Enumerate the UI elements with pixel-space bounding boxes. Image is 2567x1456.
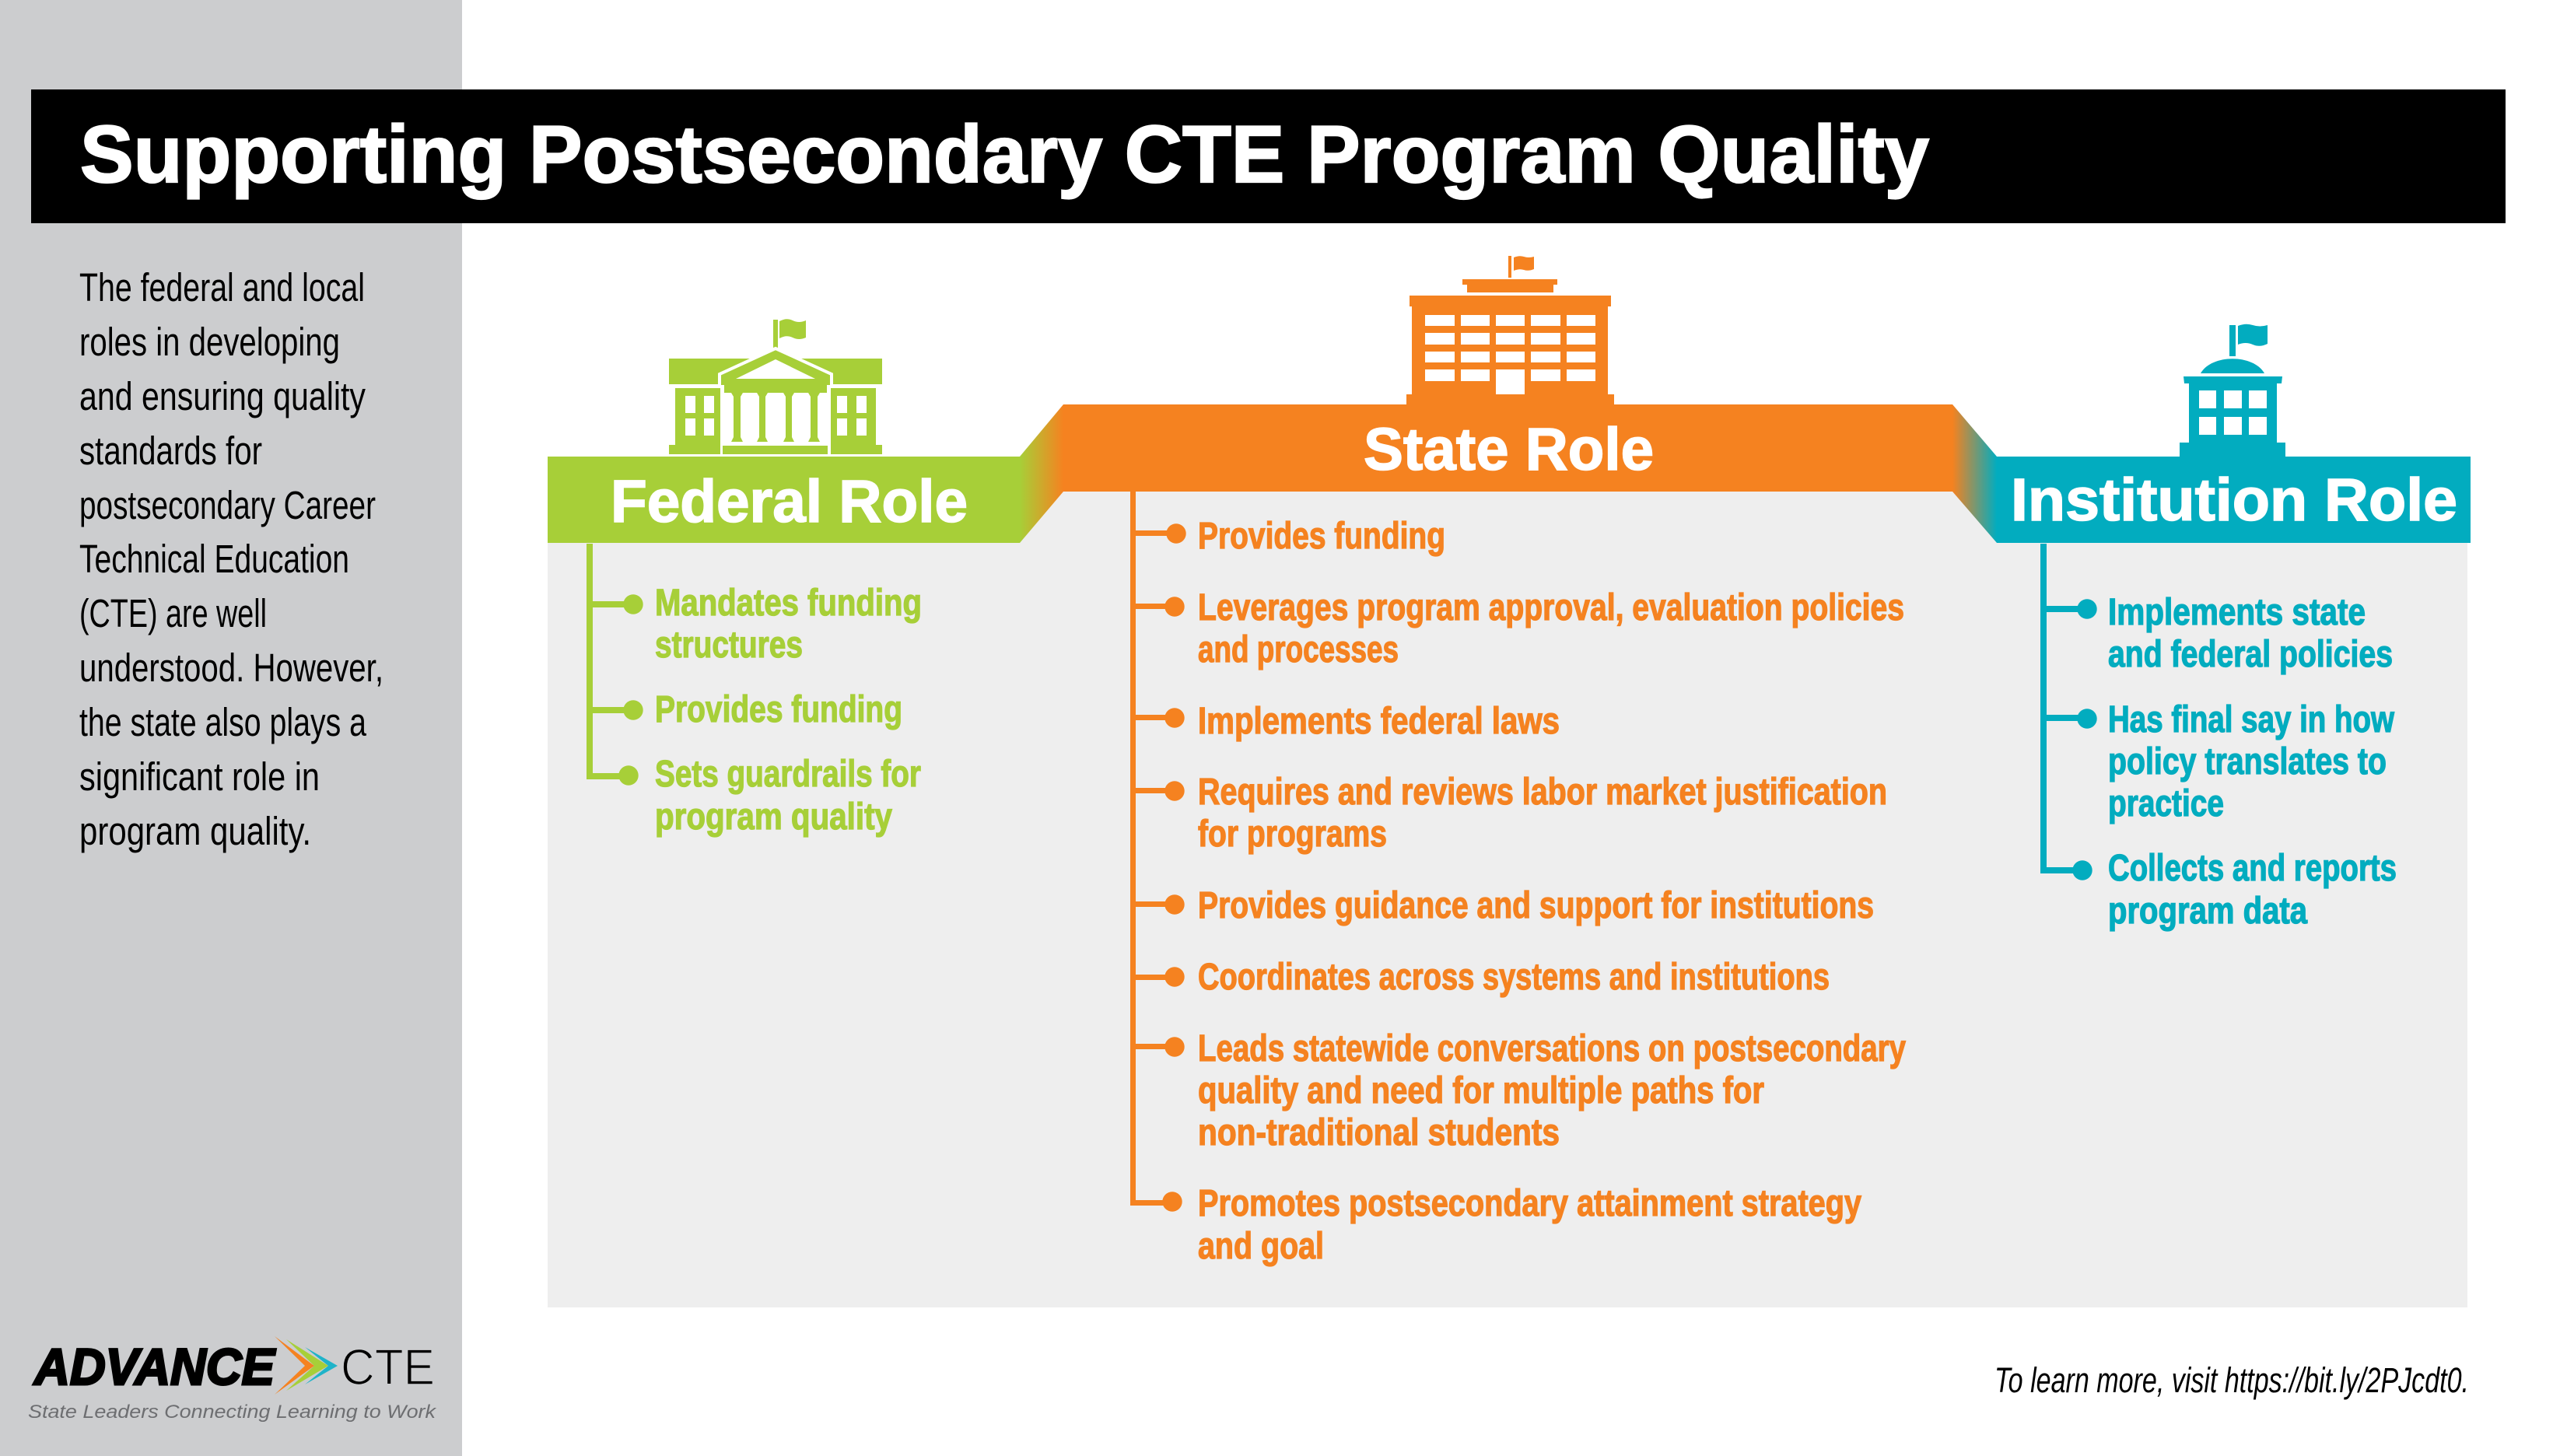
panel header: federal role	[548, 457, 1020, 543]
sidebar intro text: The federal and local	[79, 265, 365, 310]
panel header: state role	[1063, 404, 1952, 492]
state list text: for programs	[1198, 814, 1387, 855]
state list text	[1198, 516, 1906, 1267]
institution role list	[2040, 544, 2397, 932]
sidebar intro text: significant role in	[79, 754, 320, 799]
state list text: Coordinates across systems and institutions	[1198, 957, 1830, 998]
sidebar intro text: roles in developing	[79, 320, 340, 364]
federal list connector with bullets	[587, 544, 643, 786]
icon: institution domed building	[2180, 324, 2285, 457]
sidebar intro text: standards for	[79, 429, 262, 473]
arrow: gradient connector federal to state	[1020, 404, 1063, 543]
institution list text: policy translates to	[2108, 741, 2387, 782]
state list text: and processes	[1198, 629, 1399, 670]
state list text: non-traditional students	[1198, 1112, 1560, 1153]
institution list text: Collects and reports	[2108, 848, 2397, 889]
state list text: Leads statewide conversations on postsecondary	[1198, 1028, 1906, 1069]
institution list text: Has final say in how	[2108, 699, 2395, 740]
sidebar intro text: postsecondary Career	[79, 483, 376, 527]
institution list text: program data	[2108, 891, 2307, 932]
sidebar intro text	[79, 265, 383, 853]
institution list text	[2108, 592, 2397, 932]
sidebar intro text: the state also plays a	[79, 700, 366, 744]
title banner	[31, 89, 2506, 223]
heading: institution role: Institution Role	[2011, 467, 2457, 534]
institution list text: and federal policies	[2108, 634, 2393, 675]
panel header: institution role	[1997, 457, 2471, 543]
icon: federal capitol building	[669, 319, 882, 454]
institution list connector with bullets	[2040, 544, 2097, 880]
federal list text: Sets guardrails for	[655, 754, 921, 795]
state role list	[1130, 492, 1906, 1267]
federal list text: Mandates funding	[655, 583, 922, 624]
institution list text: practice	[2108, 783, 2224, 824]
logo wordmark: ADVANCE	[33, 1338, 276, 1395]
sidebar intro text: Technical Education	[79, 537, 349, 581]
state list text: quality and need for multiple paths for	[1198, 1070, 1764, 1111]
title: Supporting Postsecondary CTE Program Quality	[80, 110, 1929, 200]
federal list text	[655, 583, 922, 838]
state list text: Provides funding	[1198, 516, 1445, 557]
heading: federal role: Federal Role	[611, 468, 968, 535]
panel: left sidebar background	[0, 0, 462, 1456]
state list text: Requires and reviews labor market justification	[1198, 772, 1887, 813]
state list text: Leverages program approval, evaluation policies	[1198, 587, 1904, 628]
sidebar intro text: (CTE) are well	[79, 591, 267, 635]
federal list text: structures	[655, 625, 803, 666]
federal role list	[587, 544, 922, 838]
state list connector with bullets	[1130, 492, 1186, 1212]
state list text: and goal	[1198, 1226, 1324, 1267]
federal list text: Provides funding	[655, 689, 902, 730]
federal list text: program quality	[655, 796, 892, 838]
sidebar intro text: understood. However,	[79, 646, 383, 690]
logo CTE text: CTE	[341, 1339, 435, 1395]
sidebar intro text: and ensuring quality	[79, 374, 366, 418]
institution list text: Implements state	[2108, 592, 2366, 633]
panel: roles content background	[548, 492, 2467, 1307]
logo tagline: State Leaders Connecting Learning to Work	[28, 1402, 437, 1423]
logo: Advance CTE	[28, 1336, 437, 1423]
icon: logo chevrons	[275, 1336, 338, 1395]
heading: state role: State Role	[1364, 416, 1654, 483]
state list text: Provides guidance and support for institutions	[1198, 885, 1874, 926]
state list text: Promotes postsecondary attainment strategy	[1198, 1183, 1861, 1224]
state list text: Implements federal laws	[1198, 701, 1560, 742]
icon: state office building	[1406, 256, 1614, 405]
sidebar intro text: program quality.	[79, 809, 311, 853]
arrow: gradient connector state to institution	[1952, 404, 1997, 543]
